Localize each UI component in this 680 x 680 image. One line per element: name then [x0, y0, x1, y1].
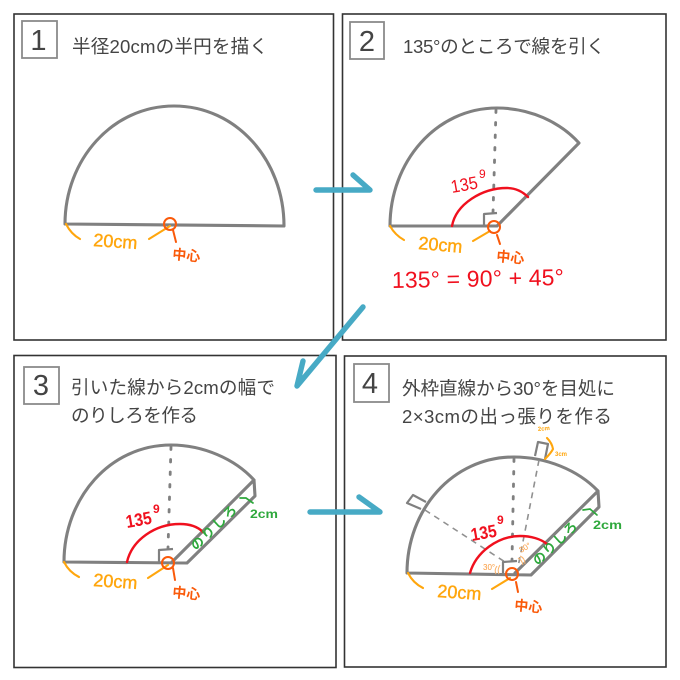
135 degree arc: 135: [469, 521, 498, 545]
radius label: [66, 224, 170, 253]
left small tab: [407, 495, 426, 509]
radius label: 20cm: [418, 233, 463, 257]
30 degree marks: 30°: [518, 541, 532, 555]
radius label: [390, 226, 490, 257]
top small tab: [535, 442, 548, 459]
heading 1: 半径20cmの半円を描く: [72, 36, 268, 57]
center mark: [164, 218, 201, 264]
radius label: [408, 573, 510, 604]
heading 2: 135°のところで線を引く: [403, 36, 605, 57]
135 degree arc: 9: [497, 513, 504, 527]
center mark: 中心: [496, 248, 525, 266]
right angle mark: [159, 549, 173, 562]
sector shape: [390, 108, 579, 226]
135 degree arc: 135: [124, 508, 153, 532]
sector with glue tab: [407, 457, 599, 575]
heading 4 second line: 2×3cmの出っ張りを作る: [402, 406, 612, 427]
radius label: 20cm: [93, 570, 138, 593]
step number 1: [22, 21, 57, 58]
center mark: 中心: [514, 597, 543, 615]
center vertical dotted line: [512, 459, 514, 560]
135 degree arc: [469, 513, 547, 573]
glue tab label: のりしろ: [188, 502, 240, 553]
tab width label: [583, 509, 622, 532]
panel 4: add outer tabs: [344, 356, 666, 667]
sector with glue tab: [64, 445, 255, 563]
135 degree arc: 9: [479, 167, 486, 181]
step number 2: 2: [359, 26, 375, 58]
arrow: step 1 to 2: [316, 175, 370, 190]
30 degree marks: 30°: [483, 563, 495, 572]
center mark: 中心: [172, 246, 201, 264]
panel 1: draw semicircle: [14, 14, 334, 340]
30 degree marks: [483, 541, 532, 574]
step number 4: [354, 364, 389, 402]
center mark: [162, 557, 201, 602]
radius label: 20cm: [93, 230, 138, 253]
step number 1: 1: [30, 25, 47, 57]
tab width label: [240, 498, 278, 521]
right angle mark: [503, 561, 517, 573]
heading 3 second line: のりしろを作る: [71, 405, 198, 426]
angle equation: 135° = 90° + 45°: [392, 264, 564, 293]
panel 2: draw line at 135 degrees: [342, 14, 666, 340]
135 degree arc: [449, 167, 528, 226]
dashed guide lines: [425, 460, 539, 567]
step number 4: 4: [362, 368, 378, 400]
small tab dimensions: 2cm: [538, 426, 550, 433]
135 degree arc: 9: [153, 502, 160, 516]
right angle mark: [484, 213, 497, 225]
center mark: [488, 221, 525, 266]
135 degree arc: [124, 502, 203, 562]
center vertical dotted line: [168, 447, 171, 548]
arrow: step 3 to 4: [310, 497, 380, 512]
step number 3: [24, 367, 59, 404]
tab width label: 2cm: [593, 518, 622, 532]
panel 3: add glue tab: [14, 356, 336, 668]
radius label: [64, 562, 168, 593]
center vertical dotted line: [493, 110, 496, 213]
heading 3: 引いた線から2cmの幅で: [71, 377, 275, 398]
small tab dimensions: [538, 426, 567, 459]
step number 2: [350, 22, 384, 59]
135 degree arc: 135: [449, 173, 479, 197]
semicircle: [65, 106, 284, 226]
tab width label: 2cm: [250, 507, 278, 521]
step number 3: 3: [33, 370, 49, 402]
glue tab label: のりしろ: [530, 518, 580, 568]
center mark: 中心: [172, 584, 201, 602]
arrow: step 2 to 3: [297, 307, 363, 386]
small tab dimensions: 3cm: [555, 452, 567, 458]
radius label: 20cm: [437, 581, 482, 604]
center mark: [506, 568, 543, 615]
heading 4: 外枠直線から30°を目処に: [402, 378, 615, 399]
